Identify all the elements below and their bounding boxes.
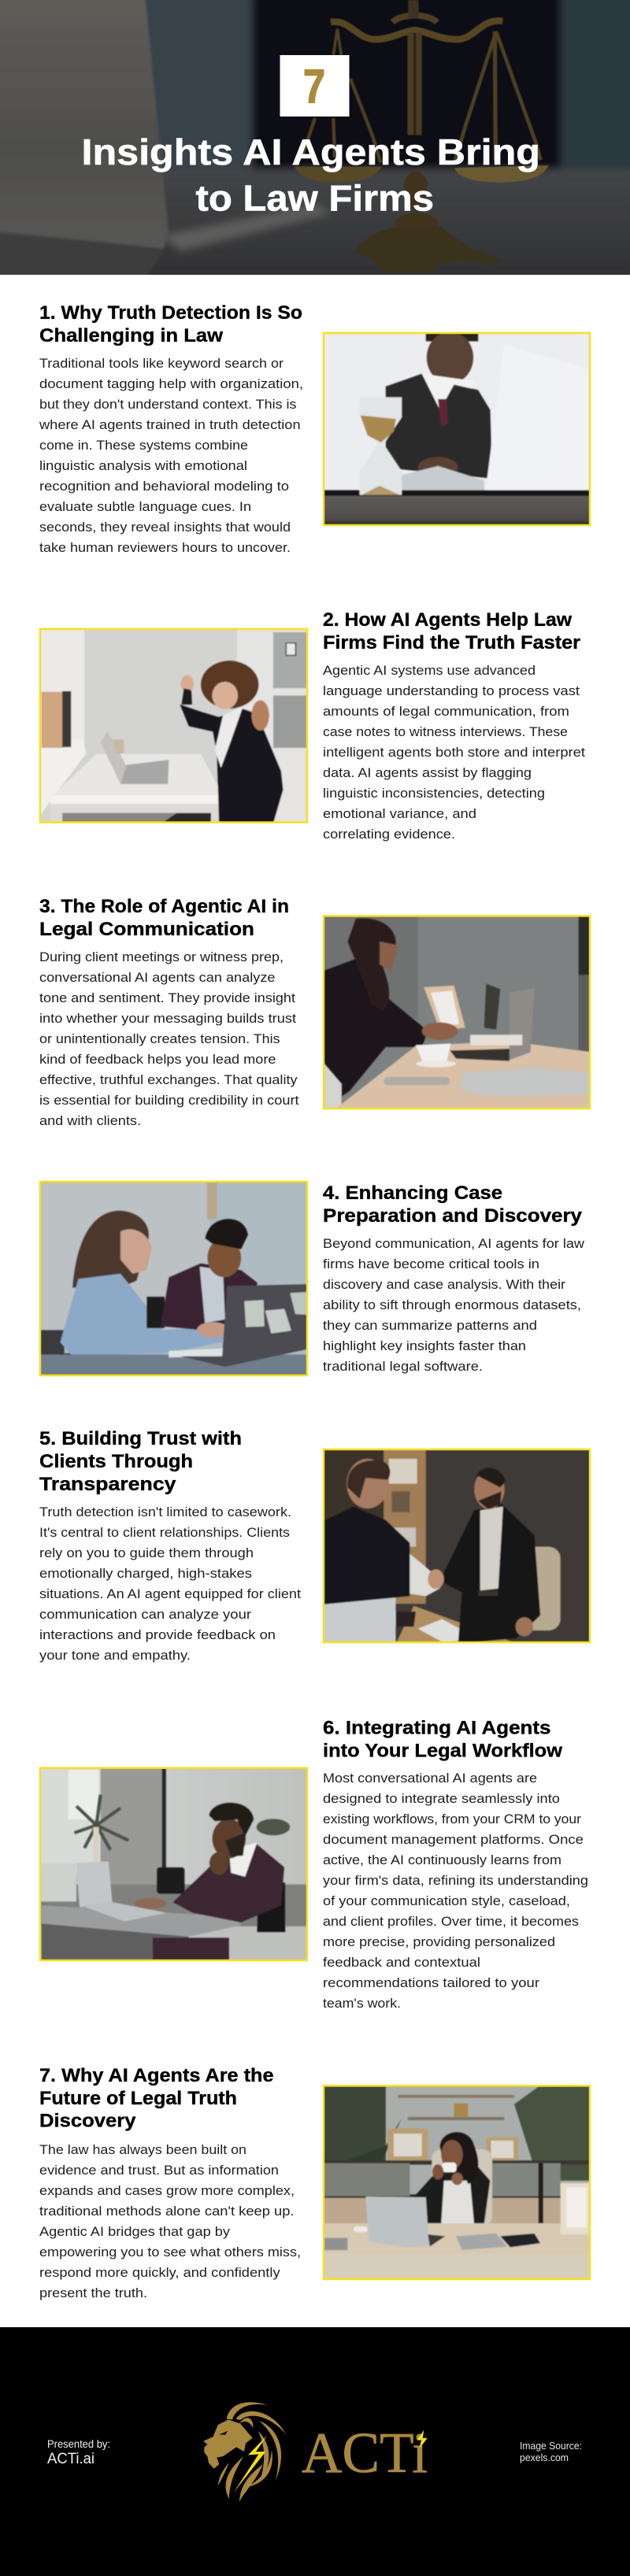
text block 4: firms have become critical tools in	[323, 1257, 539, 1271]
heading 3	[39, 896, 289, 940]
text block 3	[39, 949, 299, 1128]
image source credit: Image Source:	[520, 2440, 582, 2452]
text block 5: emotionally charged, high-stakes	[39, 1566, 252, 1581]
panel: section 2	[38, 609, 585, 842]
text block 4	[323, 1236, 585, 1374]
title: Insights AI Agents Bring	[82, 131, 540, 172]
hero banner	[0, 0, 630, 283]
heading 1: Challenging in Law	[39, 325, 223, 346]
photo: two colleagues reviewing a laptop	[38, 1179, 311, 1378]
text block 2: amounts of legal communication, from	[323, 704, 569, 719]
text block 5: communication can analyze your	[39, 1607, 251, 1622]
text block 1: Traditional tools like keyword search or	[39, 356, 284, 371]
text block 3: During client meetings or witness prep,	[39, 949, 284, 964]
text block 6: recommendations tailored to your	[323, 1975, 539, 1990]
text block 2: language understanding to process vast	[323, 683, 580, 698]
heading 1	[39, 302, 302, 346]
heading 2: Firms Find the Truth Faster	[323, 632, 580, 653]
text block 1: where AI agents trained in truth detection	[39, 417, 301, 432]
text block 5: interactions and provide feedback on	[39, 1627, 276, 1642]
presented by credit	[47, 2437, 110, 2467]
text block 1: recognition and behavioral modeling to	[39, 479, 289, 494]
text block 5: your tone and empathy.	[39, 1648, 191, 1663]
photo: man thinking at a laptop in an office	[38, 1766, 311, 1963]
text block 1	[39, 356, 303, 555]
panel: section 7	[39, 2065, 595, 2300]
image source credit	[520, 2440, 582, 2463]
text block 2: Agentic AI systems use advanced	[323, 663, 536, 678]
wordmark: ACTi	[302, 2421, 428, 2485]
text block 6: Most conversational AI agents are	[323, 1771, 537, 1786]
text block 7	[39, 2142, 301, 2300]
heading 5	[39, 1428, 242, 1495]
text block 5: situations. An AI agent equipped for client	[39, 1586, 301, 1601]
icon: small lightning bolt	[417, 2430, 428, 2448]
image source credit: pexels.com	[520, 2452, 569, 2463]
text block 7: present the truth.	[39, 2285, 147, 2300]
text block 2: emotional variance, and	[323, 806, 476, 821]
panel: section 6	[38, 1718, 588, 2011]
heading 2	[323, 609, 580, 653]
text block 1: document tagging help with organization,	[39, 376, 303, 391]
footer	[0, 2327, 630, 2576]
text block 2: correlating evidence.	[323, 827, 455, 842]
text block 3: effective, truthful exchanges. That quality	[39, 1072, 298, 1087]
heading 6: 6. Integrating AI Agents	[323, 1718, 551, 1738]
heading 3: 3. The Role of Agentic AI in	[39, 896, 289, 917]
text block 7: Agentic AI bridges that gap by	[39, 2224, 231, 2239]
text block 6: team's work.	[323, 1996, 401, 2011]
title	[82, 131, 540, 219]
heading 7: Future of Legal Truth	[39, 2088, 237, 2109]
text block 6: existing workflows, from your CRM to your	[323, 1812, 581, 1827]
text block 4: they can summarize patterns and	[323, 1318, 537, 1333]
text block 1: evaluate subtle language cues. In	[39, 499, 251, 514]
panel: section 1	[39, 302, 595, 555]
heading 7: 7. Why AI Agents Are the	[39, 2065, 273, 2086]
text block 2	[323, 663, 585, 842]
text block 6: and client profiles. Over time, it becomes	[323, 1914, 579, 1929]
text block 4: ability to sift through enormous datasets,	[323, 1297, 581, 1312]
heading 7	[39, 2065, 273, 2132]
text block 4: traditional legal software.	[323, 1359, 483, 1374]
text block 3: or unintentionally creates tension. This	[39, 1031, 280, 1046]
photo: man writing beside hourglass and laptop	[321, 327, 595, 528]
text block 6	[323, 1771, 588, 2011]
text block 6: active, the AI continuously learns from	[323, 1852, 561, 1867]
heading 4: 4. Enhancing Case	[323, 1183, 502, 1204]
logo: lion and ACTi wordmark	[203, 2402, 428, 2501]
text block 3: and with clients.	[39, 1113, 141, 1128]
text block 1: seconds, they reveal insights that would	[39, 520, 291, 535]
heading 4: Preparation and Discovery	[323, 1205, 583, 1227]
text block 6: your firm's data, refining its understanding	[323, 1873, 588, 1888]
text block 3: into whether your messaging builds trust	[39, 1011, 296, 1026]
text block 5: rely on you to guide them through	[39, 1545, 254, 1560]
text block 6: designed to integrate seamlessly into	[323, 1791, 560, 1806]
number badge	[280, 55, 350, 117]
text block 5: Truth detection isn't limited to casework.	[39, 1505, 291, 1519]
title: to Law Firms	[195, 178, 434, 219]
text block 3: conversational AI agents can analyze	[39, 970, 276, 985]
text block 7: respond more quickly, and confidently	[39, 2265, 280, 2280]
heading 2: 2. How AI Agents Help Law	[323, 609, 572, 631]
hero photo: scales of justice and laptop	[0, 0, 630, 283]
text block 6: feedback and contextual	[323, 1955, 480, 1970]
photo: woman working at a table with coffee and laptop	[321, 913, 593, 1110]
text block 7: evidence and trust. But as information	[39, 2163, 279, 2178]
text block 7: empowering you to see what others miss,	[39, 2245, 301, 2260]
text block 1: come in. These systems combine	[39, 438, 248, 453]
text block 7: traditional methods alone can't keep up.	[39, 2204, 295, 2219]
text block 4: highlight key insights faster than	[323, 1338, 526, 1353]
heading 6	[323, 1718, 562, 1762]
text block 3: is essential for building credibility in court	[39, 1093, 299, 1108]
heading 6: into Your Legal Workflow	[323, 1740, 562, 1762]
text block 6: of your communication style, caseload,	[323, 1893, 570, 1908]
photo: woman celebrating at desk with laptop	[38, 627, 309, 826]
text block 6: more precise, providing personalized	[323, 1934, 555, 1949]
text block 3: kind of feedback helps you lead more	[39, 1052, 276, 1067]
text block 7: expands and cases grow more complex,	[39, 2183, 295, 2198]
text block 4: discovery and case analysis. With their	[323, 1277, 565, 1292]
text block 2: case notes to witness interviews. These	[323, 724, 568, 739]
text block 6: document management platforms. Once	[323, 1832, 584, 1847]
text block 2: data. AI agents assist by flagging	[323, 765, 532, 780]
panel: section 4	[38, 1179, 585, 1378]
heading 5: 5. Building Trust with	[39, 1428, 242, 1449]
text block 1: take human reviewers hours to uncover.	[39, 540, 291, 555]
text block 4: Beyond communication, AI agents for law	[323, 1236, 585, 1251]
heading 7: Discovery	[39, 2110, 136, 2132]
text block 2: intelligent agents both store and interpret	[323, 745, 585, 760]
photo: two men shaking hands in an office	[321, 1447, 591, 1644]
heading 4	[323, 1183, 583, 1227]
text block 5: It's central to client relationships. Clients	[39, 1525, 290, 1540]
number badge: 7	[303, 60, 325, 113]
heading 1: 1. Why Truth Detection Is So	[39, 302, 302, 324]
icon: gold lion with lightning	[203, 2402, 286, 2501]
heading 5: Clients Through	[39, 1451, 193, 1472]
text block 3: tone and sentiment. They provide insight	[39, 990, 295, 1005]
text block 1: linguistic analysis with emotional	[39, 458, 247, 473]
text block 1: but they don't understand context. This is	[39, 397, 296, 412]
panel: section 5	[39, 1428, 591, 1663]
presented by credit: Presented by:	[47, 2437, 110, 2450]
heading 5: Transparency	[39, 1474, 176, 1495]
text block 7: The law has always been built on	[39, 2142, 246, 2157]
photo: woman sipping coffee at an office desk	[321, 2083, 595, 2282]
text block 5	[39, 1505, 301, 1663]
text block 2: linguistic inconsistencies, detecting	[323, 786, 545, 801]
panel: section 3	[39, 896, 593, 1128]
presented by credit: ACTi.ai	[47, 2451, 94, 2467]
heading 3: Legal Communication	[39, 919, 254, 940]
